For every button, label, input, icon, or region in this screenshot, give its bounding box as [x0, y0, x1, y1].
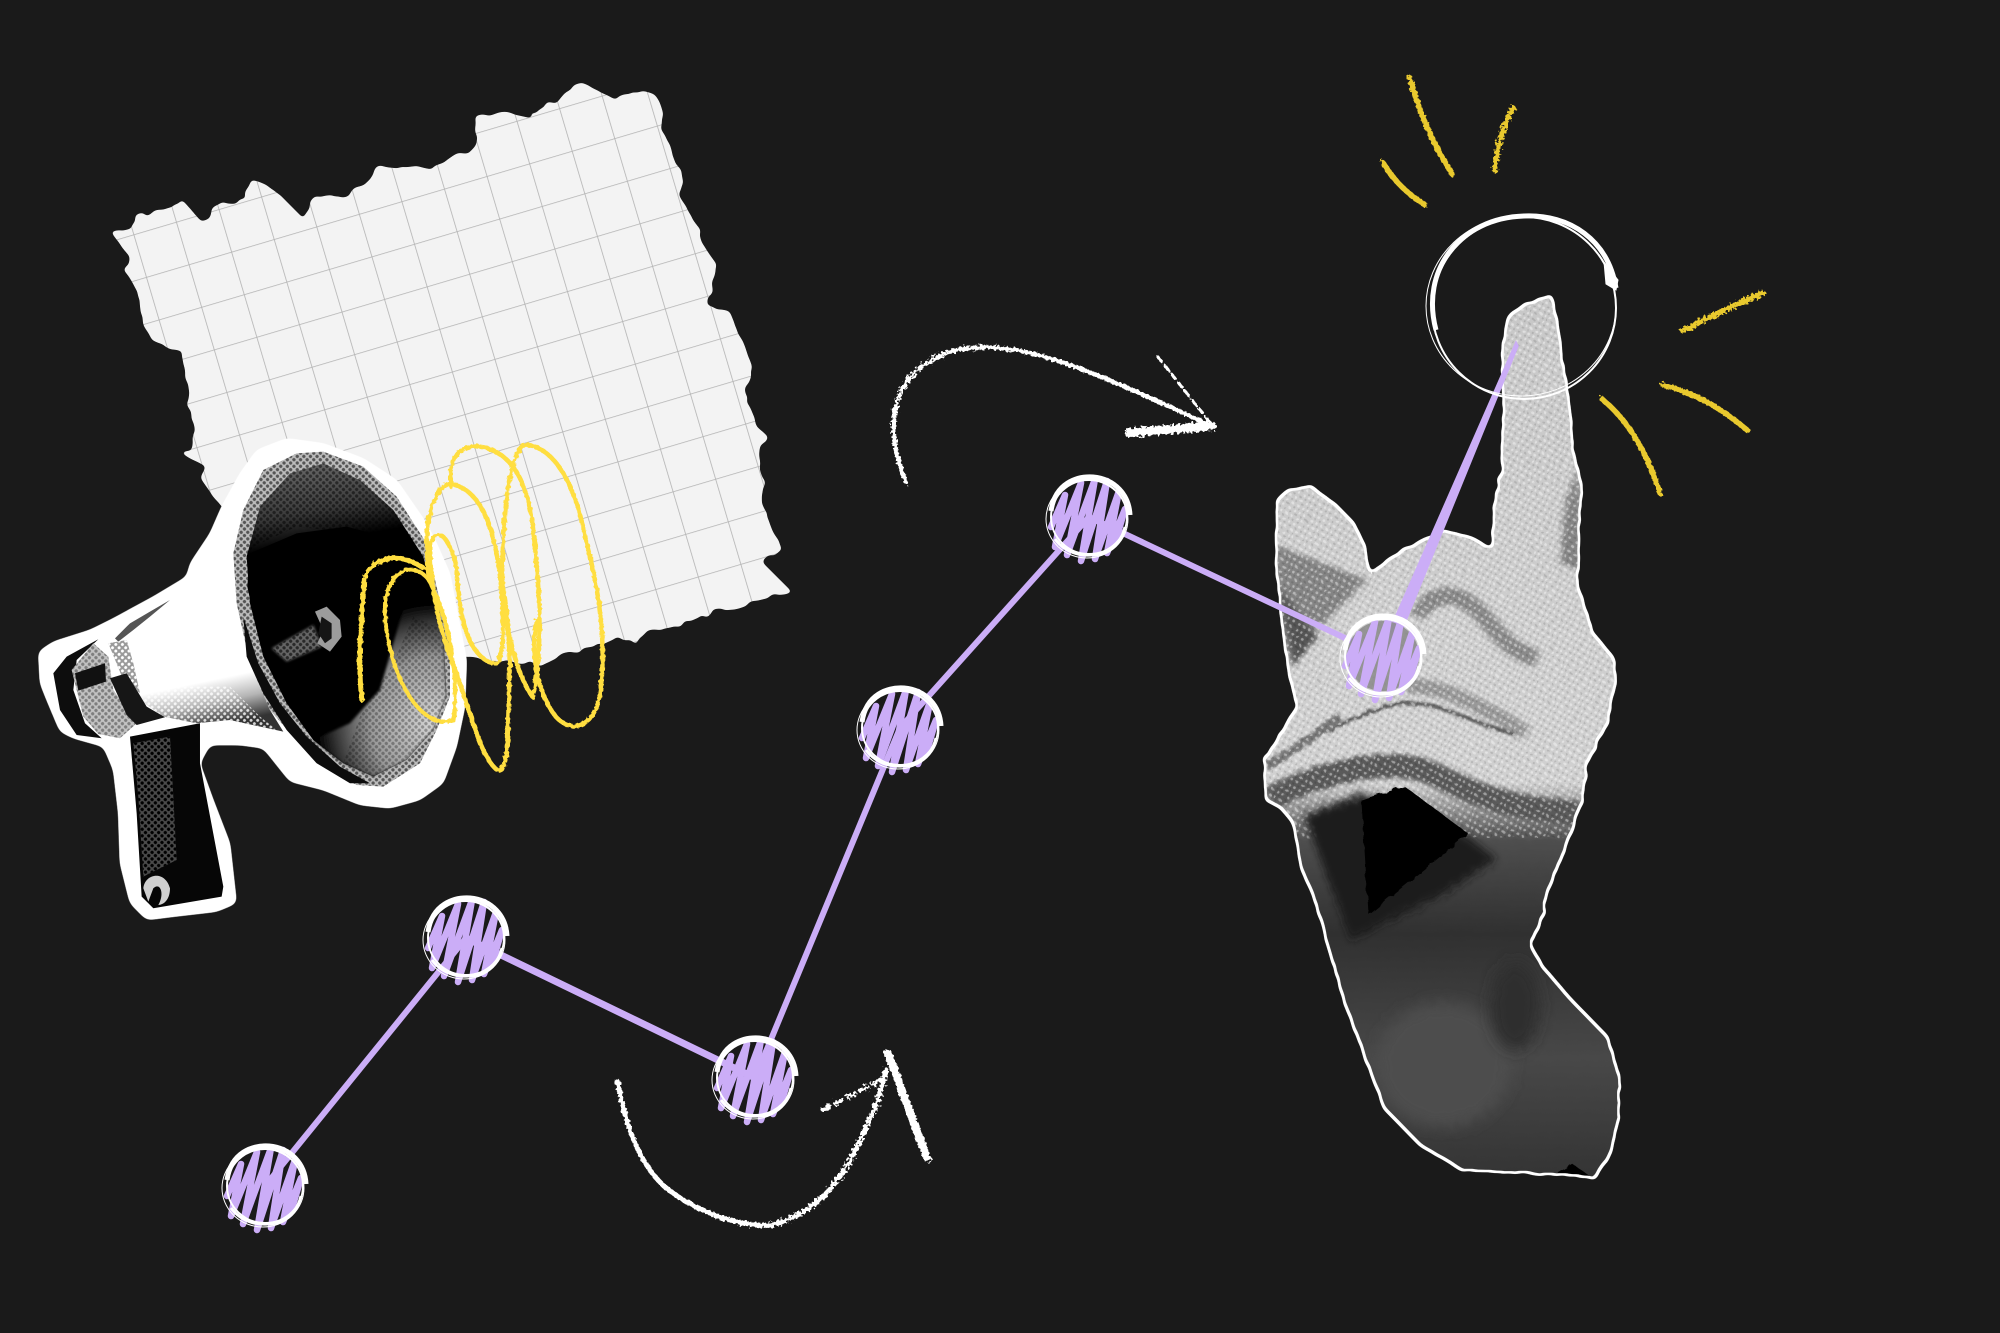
chart data point 1 [222, 1146, 306, 1230]
yellow spark rays [1383, 78, 1763, 493]
megaphone driver cap [315, 607, 342, 652]
chart data point 2 [423, 898, 507, 982]
chart line: rising segments [265, 517, 1089, 1186]
megaphone [38, 438, 603, 920]
megaphone bell rim [233, 452, 450, 787]
yellow scribble [360, 444, 603, 770]
megaphone collar bands [53, 639, 165, 738]
hand [1254, 280, 1633, 1197]
chart data point 4 [857, 688, 941, 772]
chalk arrow: bottom [618, 1053, 927, 1225]
megaphone handle [130, 723, 223, 908]
torn grid paper [112, 83, 790, 666]
chalk arrow: top [894, 347, 1212, 482]
megaphone white sticker outline [38, 438, 467, 920]
chart data point 6 on hand [1340, 616, 1424, 700]
chart data point 5 [1046, 477, 1130, 561]
hand halftone shading [1254, 280, 1633, 1197]
megaphone funnel interior [247, 463, 447, 777]
collage illustration [38, 74, 1766, 1234]
white sketched circle around fingertip [1426, 216, 1618, 399]
chart data point 3 [712, 1038, 796, 1122]
chart line: segments over hand [1089, 342, 1518, 660]
megaphone cone body [108, 553, 283, 732]
